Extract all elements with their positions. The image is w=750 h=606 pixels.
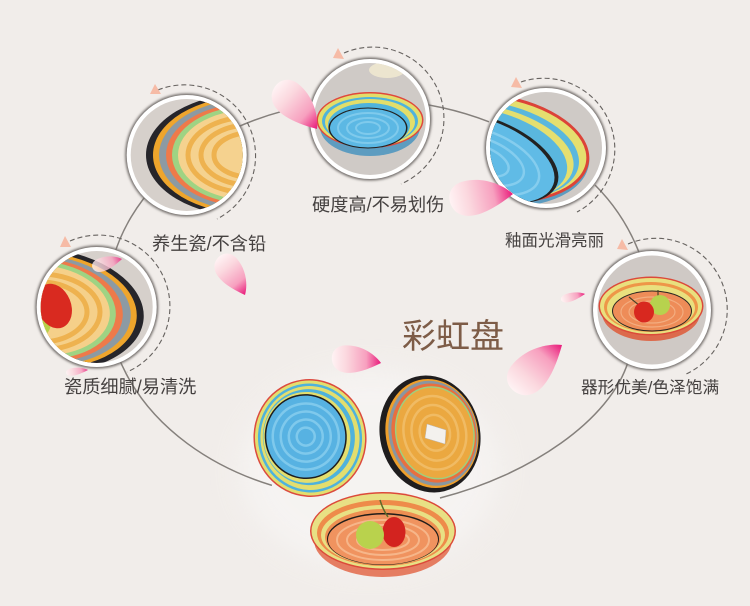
label: lead free: 养生瓷/不含铅 — [152, 234, 266, 254]
connecting ring line — [108, 100, 640, 498]
plate: orange with black rim and barcode label — [367, 365, 493, 503]
petal: glaze circle — [446, 172, 516, 220]
petal: right of title — [500, 329, 572, 403]
label: texture: 瓷质细腻/易清洗 — [64, 377, 196, 397]
petal: top centre circle — [264, 73, 331, 138]
soft glow behind plates — [240, 370, 500, 570]
petal: above plates — [332, 345, 381, 373]
title: 彩虹盘 — [402, 318, 504, 356]
feature circle: lead free plate close-up — [124, 84, 256, 220]
plate: blue front view — [246, 372, 374, 504]
fruit stem — [380, 500, 388, 517]
feature circle: hardness plate close-up — [308, 47, 444, 184]
petal: on left circle — [90, 251, 124, 275]
label: hardness: 硬度高/不易划伤 — [312, 195, 444, 215]
feature circle: fine texture plate close-up — [34, 234, 170, 372]
petal: small lower left — [65, 365, 89, 377]
labels — [64, 195, 719, 397]
label: shape and colour: 器形优美/色泽饱满 — [581, 378, 719, 397]
barcode sticker — [425, 424, 446, 444]
petal: under first label — [209, 249, 258, 301]
plate: orange with fruit — [310, 492, 456, 577]
petal: small right — [560, 289, 586, 304]
strawberry — [382, 517, 406, 547]
label: glaze: 釉面光滑亮丽 — [505, 231, 604, 250]
petals — [65, 73, 586, 403]
lime — [356, 521, 384, 549]
feature circle: glaze plate close-up — [482, 77, 616, 212]
feature circle: shape and colour plate close-up — [592, 238, 727, 375]
